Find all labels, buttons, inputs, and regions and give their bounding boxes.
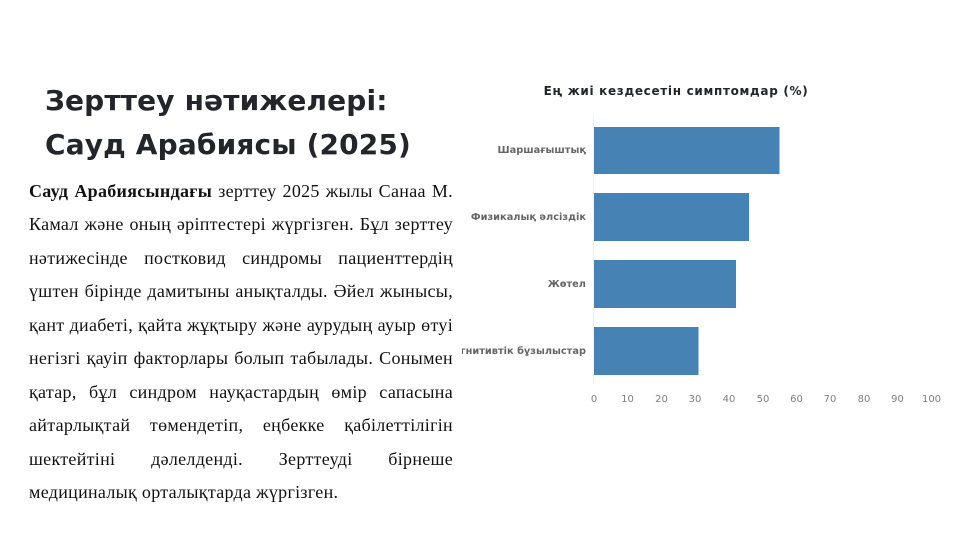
y axis line (592, 116, 594, 384)
x axis labels: 20 (655, 394, 668, 405)
category labels: Когнитивтік бұзылыстар (446, 345, 586, 357)
body text block: қатар, бұл синдром науқастардың өмір сапасына (29, 382, 453, 402)
category labels (462, 146, 586, 356)
category labels: Физикалық әлсіздік (471, 212, 586, 223)
x axis labels: 10 (621, 394, 634, 405)
title: Сауд Арабиясы (2025) (45, 128, 411, 161)
chart title: Ең жиі кездесетін симптомдар (%) (544, 84, 808, 98)
body text block: шектейтіні дәлелденді. Зерттеуді бірнеше (29, 449, 453, 469)
category labels: Жөтел (548, 279, 586, 290)
body text block: негізгі қауіп факторлары болып табылады. Сонымен (29, 348, 453, 368)
body text block: Камал және оның әріптестері жүргізген. Бұл зерттеу (29, 214, 453, 234)
title: Зерттеу нәтижелері: (45, 84, 388, 117)
body text block: қант диабеті, қайта жұқтыру және аурудың ауыр өтуі (29, 315, 453, 335)
title (45, 84, 411, 161)
x axis labels: 50 (757, 394, 769, 405)
body text block: Сауд Арабиясындағы зерттеу 2025 жылы Санаа М. (29, 180, 453, 200)
x axis labels: 30 (689, 394, 701, 405)
x axis labels: 40 (723, 394, 735, 405)
bars (594, 127, 780, 375)
category labels: Шаршағыштық (497, 145, 586, 156)
body text block (29, 180, 453, 502)
body text block: үштен бірінде дамитыны анықталды. Әйел жынысы, (29, 281, 453, 301)
x axis labels (591, 394, 941, 405)
x axis labels: 0 (591, 394, 597, 405)
x axis labels: 70 (824, 394, 836, 405)
x axis labels: 90 (891, 394, 904, 405)
x axis labels: 60 (790, 394, 803, 405)
bar chart: most common symptoms (462, 86, 940, 402)
body text block: медициналық орталықтарда жүргізген. (29, 482, 338, 502)
body text block: нәтижесінде постковид синдромы пациенттердің (29, 248, 453, 268)
x axis labels: 80 (858, 394, 870, 405)
x axis labels: 100 (922, 394, 941, 405)
body text block: айтарлықтай төмендетіп, еңбекке қабілеттілігін (29, 415, 453, 435)
